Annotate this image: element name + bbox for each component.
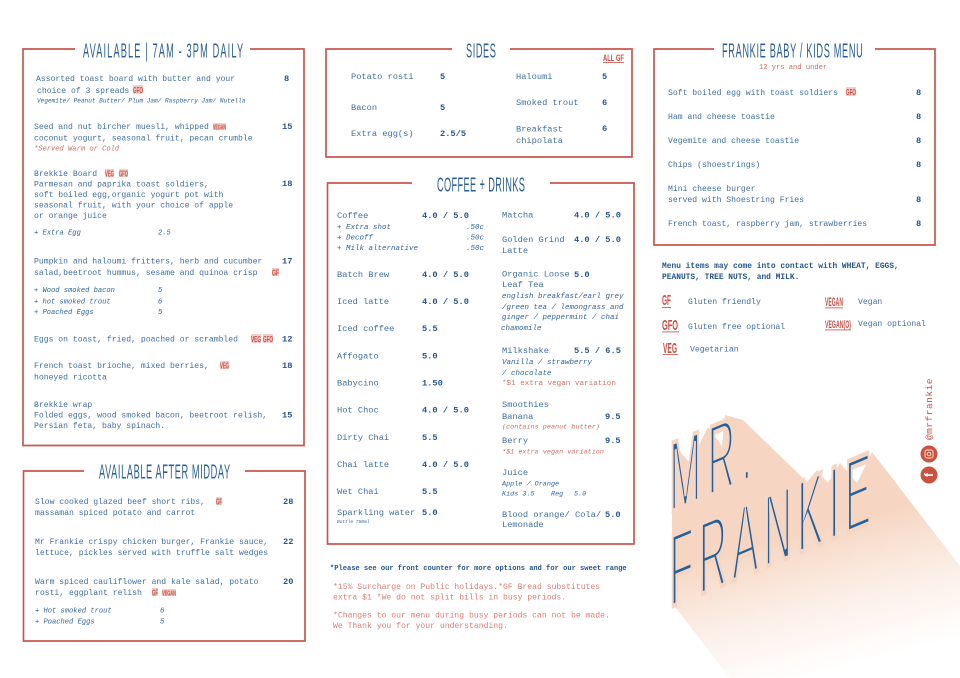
item: pumpkin fritters: + hot smoked trout bbox=[34, 298, 111, 306]
drinks right column: Lemonade bbox=[502, 520, 544, 530]
drinks left column: 4.0 / 5.0 bbox=[422, 297, 469, 307]
sides list: 5 bbox=[440, 72, 445, 82]
drinks left column: Batch Brew bbox=[337, 270, 390, 280]
item: brekkie board: VEG bbox=[105, 168, 114, 178]
legend: dietary key: VEGAN bbox=[825, 295, 843, 309]
drinks right column: Matcha bbox=[502, 210, 533, 220]
drinks right column: Organic Loose bbox=[502, 270, 570, 280]
item: toast board: Assorted toast board with butter and your bbox=[36, 75, 235, 84]
panel: available 7am-3pm daily bbox=[23, 41, 304, 446]
item: beef short ribs bbox=[35, 496, 293, 518]
item: bircher muesli: VEGAN bbox=[213, 124, 226, 132]
item: toast board: GFO bbox=[133, 85, 143, 95]
legend: dietary key: Vegan optional bbox=[858, 320, 926, 329]
legend: dietary key: Gluten friendly bbox=[688, 298, 761, 307]
sides list bbox=[351, 72, 607, 146]
drinks left column: Iced coffee bbox=[337, 324, 394, 334]
item: brekkie wrap: Folded eggs, wood smoked bacon, beetroot relish, bbox=[34, 412, 267, 420]
kids items list: 8 bbox=[916, 136, 921, 146]
note: front counter: *Please see our front counter for more options and for our sweet range bbox=[330, 565, 627, 573]
drinks right column: /green tea / lemongrass and bbox=[502, 304, 624, 312]
drinks left column: Babycino bbox=[337, 378, 379, 388]
item: eggs on toast: GFO bbox=[263, 334, 273, 344]
item: cauliflower salad: 5 bbox=[160, 618, 165, 626]
drinks left column: 4.0 / 5.0 bbox=[422, 270, 469, 280]
panel frame bbox=[326, 49, 632, 157]
drinks right column: 9.5 bbox=[605, 436, 621, 446]
sides list: Bacon bbox=[351, 103, 377, 113]
sides list: 5 bbox=[602, 72, 607, 82]
drinks right column: Leaf Tea bbox=[502, 280, 544, 290]
panel: sides bbox=[326, 41, 632, 157]
drinks left column: + Milk alternative bbox=[337, 245, 419, 253]
social: instagram handle and icons: @mrfrankie bbox=[924, 378, 935, 440]
logo: Mr. Frankie: FRANKIE bbox=[670, 428, 876, 630]
item: chicken burger: lettuce, pickles served with truffle salt wedges bbox=[35, 549, 268, 558]
heading: kids menu: FRANKIE BABY / KIDS MENU bbox=[722, 41, 863, 63]
item: pumpkin fritters: + Wood smoked bacon bbox=[34, 287, 115, 295]
item: pumpkin fritters: 5 bbox=[158, 309, 163, 317]
legend: dietary key: VEG bbox=[663, 340, 677, 357]
item: toast board: 8 bbox=[284, 74, 289, 84]
item: bircher muesli: 15 bbox=[282, 122, 292, 132]
drinks right column: *$1 extra vegan variation bbox=[502, 380, 616, 388]
subheading: age limit: 12 yrs and under bbox=[759, 64, 827, 72]
note: surcharge and policies: *15% Surcharge on Public holidays.*GF Bread substitutes bbox=[333, 583, 600, 592]
sides list: Extra egg(s) bbox=[351, 129, 414, 139]
drinks right column bbox=[501, 210, 624, 530]
drinks left column: Hot Choc bbox=[337, 406, 379, 416]
kids items list: French toast, raspberry jam, strawberries bbox=[668, 220, 867, 229]
note: surcharge and policies: *Changes to our menu during busy periods can not be made. bbox=[333, 612, 610, 620]
drinks left column: .50c bbox=[466, 234, 485, 242]
social: instagram handle and icons bbox=[920, 378, 938, 484]
drinks left column: Bottle 750ml bbox=[337, 519, 370, 525]
sides list: Smoked trout bbox=[516, 98, 579, 108]
item: pumpkin fritters: salad,beetroot hummus, sesame and quinoa crisp bbox=[34, 269, 258, 278]
item: cauliflower salad: Warm spiced cauliflower and kale salad, potato bbox=[35, 578, 259, 587]
drinks left column bbox=[337, 211, 485, 525]
drinks left column: + Decoff bbox=[337, 234, 374, 242]
item: brekkie board: GFO bbox=[119, 168, 128, 178]
item: brekkie board: soft boiled egg,organic yogurt pot with bbox=[34, 191, 224, 200]
drinks right column: Golden Grind bbox=[502, 235, 565, 245]
item: bircher muesli: *Served Warm or Cold bbox=[34, 146, 120, 154]
heading: coffee + drinks: COFFEE + DRINKS bbox=[437, 175, 525, 197]
kids items list: Soft boiled egg with toast soldiers bbox=[668, 89, 838, 98]
item: eggs on toast: Eggs on toast, fried, poached or scrambled bbox=[34, 336, 238, 344]
drinks right column: Reg bbox=[551, 490, 563, 498]
panel: available after midday bbox=[24, 462, 305, 641]
item: french toast: VEG bbox=[220, 360, 229, 370]
drinks left column: Chai latte bbox=[337, 460, 389, 470]
item: beef short ribs: Slow cooked glazed beef short ribs, bbox=[35, 498, 205, 507]
item: pumpkin fritters: 5 bbox=[158, 287, 163, 295]
drinks right column: Kids 3.5 bbox=[502, 490, 535, 498]
item: brekkie board bbox=[34, 168, 292, 238]
panel frame bbox=[23, 49, 304, 446]
item: pumpkin fritters: 6 bbox=[158, 298, 163, 306]
drinks left column: .50c bbox=[466, 224, 485, 232]
drinks left column: Wet Chai bbox=[337, 487, 379, 497]
sides list: Potato rosti bbox=[351, 72, 414, 82]
item: brekkie board: + Extra Egg bbox=[34, 230, 82, 238]
drinks right column: english breakfast/earl grey bbox=[502, 293, 624, 301]
drinks left column: 4.0 / 5.0 bbox=[422, 406, 469, 416]
drinks left column: + Extra shot bbox=[337, 224, 391, 232]
kids items list: GFO bbox=[846, 87, 856, 97]
drinks left column: Sparkling water bbox=[337, 508, 415, 518]
kids items list: Ham and cheese toastie bbox=[668, 113, 775, 122]
item: brekkie board: seasonal fruit, with your choice of apple bbox=[34, 202, 233, 210]
allergen warning: Menu items may come into contact with WHEAT, EGGS, bbox=[662, 262, 899, 271]
item: brekkie wrap: Persian feta, baby spinach. bbox=[34, 422, 165, 431]
item: chicken burger bbox=[35, 537, 293, 558]
item: bircher muesli: coconut yogurt, seasonal fruit, pecan crumble bbox=[34, 134, 253, 144]
kids items list: 8 bbox=[916, 112, 921, 122]
item: eggs on toast bbox=[34, 334, 292, 344]
logo: long shadow bbox=[672, 415, 960, 678]
drinks left column: 4.0 / 5.0 bbox=[422, 460, 469, 470]
drinks right column: Latte bbox=[502, 246, 528, 256]
legend: dietary key: Vegan bbox=[858, 298, 882, 307]
item: pumpkin fritters: + Poached Eggs bbox=[34, 309, 94, 317]
item: brekkie board: 2.5 bbox=[158, 230, 172, 238]
drinks right column: Berry bbox=[502, 436, 528, 446]
item: cauliflower salad: GF bbox=[152, 588, 158, 598]
legend: dietary key: VEGAN(O) bbox=[825, 319, 851, 331]
item: cauliflower salad: + Poached Eggs bbox=[35, 618, 95, 626]
item: french toast bbox=[34, 360, 292, 382]
heading: after midday: AVAILABLE AFTER MIDDAY bbox=[99, 462, 230, 484]
item: french toast: French toast brioche, mixed berries, bbox=[34, 362, 209, 371]
drinks right column: Milkshake bbox=[502, 346, 549, 356]
badge: all gluten free bbox=[603, 53, 624, 63]
icon: facebook: f bbox=[922, 472, 936, 477]
drinks right column: Apple / Orange bbox=[501, 480, 559, 488]
drinks left column: .50c bbox=[466, 245, 485, 253]
panel: coffee and drinks bbox=[328, 175, 634, 544]
drinks right column: 5.0 bbox=[574, 270, 590, 280]
drinks right column: 5.0 bbox=[574, 490, 586, 498]
drinks right column: Juice bbox=[502, 468, 528, 478]
item: toast board: choice of 3 spreads bbox=[37, 87, 129, 96]
item: cauliflower salad bbox=[35, 577, 293, 626]
item: cauliflower salad: VEGAN bbox=[162, 590, 176, 598]
drinks right column: 5.5 / 6.5 bbox=[574, 346, 621, 356]
note: surcharge and policies: We Thank you for your understanding. bbox=[333, 622, 508, 631]
kids items list: Vegemite and cheese toastie bbox=[668, 137, 799, 146]
kids items list: Mini cheese burger bbox=[668, 185, 756, 194]
sides list: 6 bbox=[602, 124, 607, 134]
item: cauliflower salad: + Hot smoked trout bbox=[35, 608, 112, 616]
drinks right column: 5.0 bbox=[605, 510, 621, 520]
note: surcharge and policies bbox=[333, 583, 610, 631]
allergen warning bbox=[662, 262, 899, 282]
drinks left column: 5.5 bbox=[422, 433, 438, 443]
legend: dietary key: Gluten free optional bbox=[688, 323, 785, 332]
item: brekkie wrap bbox=[34, 401, 292, 431]
panel frame bbox=[654, 49, 935, 245]
item: cauliflower salad: 20 bbox=[283, 577, 293, 587]
item: bircher muesli: Seed and nut bircher muesli, whipped bbox=[34, 123, 209, 132]
item: pumpkin fritters: GF bbox=[272, 268, 279, 278]
icon: instagram bbox=[920, 446, 938, 462]
heading: sides: SIDES bbox=[466, 41, 496, 63]
item: brekkie wrap: 15 bbox=[282, 410, 292, 420]
item: beef short ribs: massaman spiced potato and carrot bbox=[35, 509, 195, 518]
drinks right column: / chocolate bbox=[502, 370, 552, 378]
item: bircher muesli bbox=[34, 122, 292, 154]
sides list: Breakfast bbox=[516, 124, 563, 134]
item: beef short ribs: 28 bbox=[283, 497, 293, 507]
drinks right column: 4.0 / 5.0 bbox=[574, 235, 621, 245]
item: eggs on toast: 12 bbox=[282, 334, 292, 344]
heading: available hours: AVAILABLE | 7AM - 3PM DAILY bbox=[83, 41, 243, 63]
kids items list: served with Shoestring Fries bbox=[668, 196, 804, 205]
item: french toast: honeyed ricotta bbox=[34, 374, 107, 382]
drinks left column: Affogato bbox=[337, 352, 379, 362]
legend: dietary key: GFO bbox=[662, 317, 678, 334]
sides list: 6 bbox=[602, 98, 607, 108]
drinks right column: Blood orange/ Cola/ bbox=[502, 510, 601, 520]
sides list: 2.5/5 bbox=[440, 129, 466, 139]
item: beef short ribs: GF bbox=[216, 496, 222, 506]
drinks right column: chamomile bbox=[501, 325, 542, 333]
item: eggs on toast: VEG bbox=[251, 334, 261, 344]
panel: kids menu bbox=[654, 41, 935, 245]
item: brekkie board: or orange juice bbox=[34, 212, 107, 221]
drinks left column: 5.5 bbox=[422, 487, 438, 497]
item: chicken burger: Mr Frankie crispy chicken burger, Frankie sauce, bbox=[35, 538, 268, 547]
drinks left column: Iced latte bbox=[337, 297, 389, 307]
item: brekkie wrap: Brekkie wrap bbox=[34, 401, 92, 410]
drinks right column: Vanilla / strawberry bbox=[502, 359, 593, 367]
drinks left column: Coffee bbox=[337, 211, 368, 221]
item: brekkie board: 18 bbox=[282, 179, 292, 189]
kids items list bbox=[668, 87, 921, 229]
drinks right column: 4.0 / 5.0 bbox=[574, 210, 621, 220]
item: toast board: Vegemite/ Peanut Butter/ Plum Jam/ Raspberry Jam/ Nutella bbox=[37, 98, 246, 104]
item: toast board bbox=[36, 74, 289, 104]
kids items list: 8 bbox=[916, 219, 921, 229]
drinks right column: Banana bbox=[502, 412, 533, 422]
item: french toast: 18 bbox=[282, 361, 292, 371]
sides list: chipolata bbox=[516, 136, 563, 146]
drinks left column: 5.5 bbox=[422, 324, 438, 334]
item: cauliflower salad: 6 bbox=[160, 608, 165, 616]
badge: all gluten free: ALL GF bbox=[603, 53, 624, 63]
logo: Mr. Frankie: MR. bbox=[670, 387, 759, 535]
item: brekkie board: Brekkie Board bbox=[34, 170, 97, 179]
kids items list: 8 bbox=[916, 88, 921, 98]
legend: dietary key bbox=[662, 292, 926, 357]
drinks left column: Dirty Chai bbox=[337, 433, 389, 443]
drinks left column: 5.0 bbox=[422, 508, 438, 518]
drinks left column: 5.0 bbox=[422, 352, 438, 362]
sides list: Haloumi bbox=[516, 72, 552, 82]
drinks right column: ginger / peppermint / chai bbox=[502, 314, 619, 322]
item: pumpkin fritters: Pumpkin and haloumi fritters, herb and cucumber bbox=[34, 258, 262, 266]
drinks right column: *$1 extra vegan variation bbox=[502, 448, 604, 456]
item: pumpkin fritters: 17 bbox=[282, 256, 292, 266]
kids items list: Chips (shoestrings) bbox=[668, 161, 760, 170]
panel frame bbox=[24, 471, 305, 641]
kids items list: 8 bbox=[916, 195, 921, 205]
note: surcharge and policies: extra $1 *We do not split bills in busy periods. bbox=[333, 594, 566, 602]
legend: dietary key: Vegetarian bbox=[690, 346, 739, 354]
item: chicken burger: 22 bbox=[283, 537, 293, 547]
drinks left column: 4.0 / 5.0 bbox=[422, 211, 469, 221]
sides list: 5 bbox=[440, 103, 445, 113]
kids items list: 8 bbox=[916, 160, 921, 170]
drinks right column: 9.5 bbox=[605, 412, 621, 422]
drinks right column: (contains peanut butter) bbox=[502, 424, 600, 432]
allergen warning: PEANUTS, TREE NUTS, and MILK. bbox=[662, 273, 799, 282]
item: cauliflower salad: rosti, eggplant relish bbox=[35, 589, 142, 598]
item: pumpkin fritters bbox=[34, 256, 292, 317]
item: brekkie board: Parmesan and paprika toast soldiers, bbox=[34, 180, 209, 190]
panel frame bbox=[328, 183, 634, 544]
drinks left column: 1.50 bbox=[422, 378, 443, 388]
legend: dietary key: GF bbox=[662, 292, 671, 309]
drinks right column: Smoothies bbox=[502, 400, 549, 410]
